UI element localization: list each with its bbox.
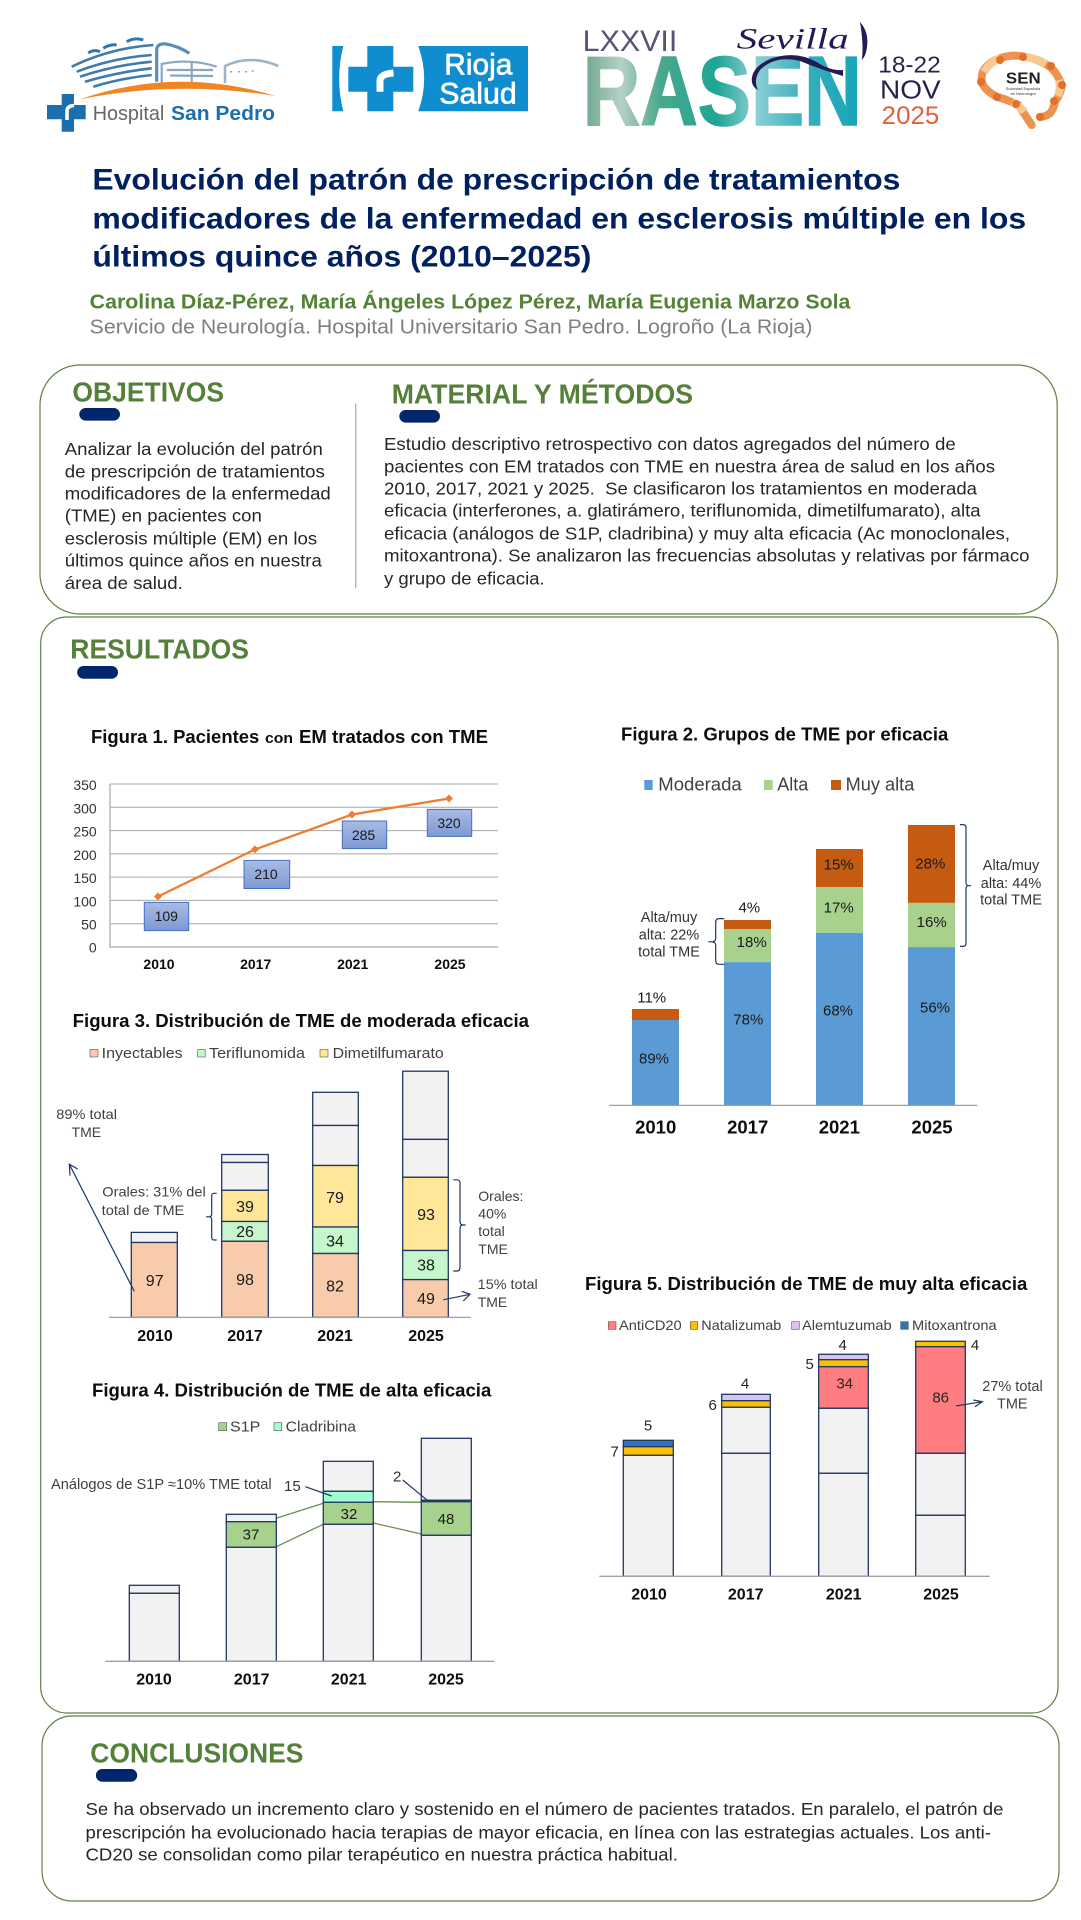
logo: SEN: Sociedad Española: [1006, 86, 1041, 91]
text: métodos: mitoxantrona). Se analizaron las frecuencias absolutas y relativas por fármaco: [384, 546, 1030, 566]
affiliation: Servicio de Neurología. Hospital Universitario San Pedro. Logroño (La Rioja): [90, 316, 812, 338]
legend: figura 5: Alemtuzumab: [802, 1317, 892, 1333]
logo: Rioja Salud: Salud: [439, 77, 517, 110]
annotation: orales 40%: TME: [478, 1241, 508, 1257]
logo: SEN: de Neurología: [1010, 91, 1036, 96]
chart: figura 4 stacked bars: 2025: [428, 1672, 464, 1689]
chart: figura 1 line chart: 200: [73, 847, 97, 863]
chart: figura 3 stacked bars: 34: [326, 1234, 344, 1251]
chart: figura 2 stacked bars: 56%: [920, 1000, 950, 1016]
heading: objetivos: OBJETIVOS: [72, 376, 224, 408]
pill: conclusiones: [96, 1769, 137, 1782]
annotation: alta/muy alta 22%: Alta/muy: [641, 910, 698, 926]
label: 15 cladribina: 15: [284, 1478, 301, 1495]
legend: figura 2: Muy alta: [846, 775, 915, 795]
chart: figura 1 line chart: 350: [73, 777, 97, 793]
chart: figura 1 line chart: 210: [254, 866, 278, 882]
connector lines: [276, 1502, 421, 1547]
chart: figura 1 line chart: 320: [437, 815, 461, 831]
annotation: 15% total TME: TME: [478, 1294, 507, 1310]
text: métodos: Estudio descriptivo retrospectivo con datos agregados del número de: [384, 434, 956, 454]
legend: figura 4: S1P: [230, 1419, 260, 1436]
figura 5 title: Figura 5. Distribución de TME de muy alta eficacia: [585, 1274, 1028, 1294]
pill: resultados: [77, 666, 118, 679]
chart: figura 2 stacked bars: 28%: [915, 856, 945, 873]
title: [92, 163, 1026, 274]
chart: figura 2 stacked bars: 11%: [637, 990, 666, 1006]
chart: figura 5 stacked bars: 86: [932, 1390, 949, 1407]
legend: figura 5: AntiCD20: [619, 1317, 682, 1333]
chart: figura 1 line chart: 2017: [240, 956, 271, 972]
chart: figura 5 stacked bars: 34: [836, 1376, 853, 1393]
annotation: orales 31%: [102, 1184, 217, 1240]
panel: objetivos y métodos: [40, 365, 1057, 614]
chart: figura 1 line chart: 250: [73, 824, 97, 840]
chart: figura 1 line chart: 150: [73, 870, 97, 886]
chart: figura 1 line chart: 0: [89, 940, 97, 956]
text: objetivos: de prescripción de tratamientos: [65, 462, 325, 482]
chart: figura 4 stacked bars: 2010: [136, 1672, 172, 1689]
text: objetivos: (TME) en pacientes con: [65, 506, 262, 526]
chart: figura 1 line chart: 2021: [337, 956, 368, 972]
chart: figura 1 line chart: 300: [73, 800, 97, 816]
annotation: 27% total TME: 27% total: [982, 1379, 1043, 1395]
chart: figura 2 stacked bars: [609, 775, 1042, 1138]
annotation: orales 31%: Orales: 31% del: [102, 1184, 206, 1200]
chart: figura 2 stacked bars: 78%: [733, 1011, 763, 1028]
logo: Rioja Salud: [332, 46, 528, 111]
chart: figura 4 stacked bars: 32: [341, 1506, 357, 1523]
text: conclusiones: CD20 se consolidan como pilar terapéutico en nuestra práctica habitual.: [86, 1844, 678, 1864]
chart: figura 5 stacked bars: 2010: [631, 1587, 667, 1604]
text: métodos: eficacia (análogos de S1P, cladribina) y muy alta eficacia (Ac monoclonales,: [384, 523, 1010, 543]
text: objetivos: últimos quince años en nuestra: [65, 551, 322, 571]
chart: figura 5 stacked bars: 4: [839, 1337, 847, 1354]
arrow: 89%: [69, 1164, 134, 1291]
chart: figura 3 stacked bars: [56, 1045, 538, 1345]
legend: figura 5: Mitoxantrona: [912, 1317, 997, 1333]
legend: figura 5: Natalizumab: [701, 1317, 782, 1333]
chart: figura 4 stacked bars: 2021: [331, 1672, 367, 1689]
text: métodos: [384, 434, 1030, 588]
chart: figura 1 line chart: 285: [352, 827, 375, 843]
label: 15 cladribina: [284, 1478, 332, 1496]
chart: figura 3 stacked bars: 97: [146, 1273, 164, 1290]
panel: conclusiones: [42, 1716, 1059, 1901]
legend: figura 2: Moderada: [658, 775, 743, 795]
text: conclusiones: [86, 1799, 1004, 1864]
title: modificadores de la enfermedad en esclerosis múltiple en los: [92, 202, 1026, 235]
chart: figura 1 line chart: 2010: [143, 956, 175, 972]
arrow: 15%: [443, 1291, 470, 1301]
chart: figura 2 stacked bars: 2010: [635, 1117, 676, 1138]
annotation: 27% total TME: [982, 1379, 1043, 1413]
chart: figura 5 stacked bars: 4: [741, 1376, 749, 1393]
chart: figura 5 stacked bars: 5: [644, 1418, 652, 1435]
chart: figura 3 stacked bars: 38: [417, 1258, 435, 1275]
annotation: 89% total TME: [56, 1106, 117, 1140]
text: conclusiones: Se ha observado un incremento claro y sostenido en el número de pacientes tratados. En paralelo, el patrón de: [86, 1799, 1004, 1819]
annotation: 27% total TME: TME: [997, 1397, 1028, 1413]
figura 1 title: con: [265, 730, 293, 747]
chart: figura 2 stacked bars: 2025: [911, 1117, 953, 1138]
annotation: orales 40%: total: [478, 1223, 505, 1239]
chart: figura 5 stacked bars: 2021: [826, 1587, 862, 1604]
pill: métodos: [399, 410, 440, 423]
figura 3 title: Figura 3. Distribución de TME de moderada eficacia: [73, 1011, 530, 1031]
chart: figura 5 stacked bars: 4: [971, 1337, 979, 1354]
chart: figura 3 stacked bars: 49: [417, 1291, 435, 1308]
logo: SEN: SEN: [1006, 70, 1041, 87]
legend: figura 2: [644, 775, 915, 795]
legend: figura 3: Dimetilfumarato: [333, 1045, 444, 1062]
label: 2 cladribina: [393, 1469, 429, 1502]
text: objetivos: [65, 439, 331, 593]
text: objetivos: área de salud.: [65, 573, 183, 593]
annotation: 89% total TME: TME: [72, 1124, 101, 1140]
logo: Rioja Salud: Rioja: [444, 48, 513, 81]
chart: figura 3 stacked bars: 2010: [137, 1328, 173, 1345]
legend: figura 5: [608, 1317, 997, 1333]
chart: figura 3 stacked bars: 93: [417, 1207, 435, 1224]
heading: resultados: RESULTADOS: [70, 634, 249, 664]
annotation: orales 40%: 40%: [478, 1206, 506, 1222]
chart: figura 3 stacked bars: 82: [326, 1279, 344, 1296]
pill: objetivos: [79, 408, 120, 421]
figura 2 title: Figura 2. Grupos de TME por eficacia: [621, 724, 949, 744]
annotation: 89% total TME: 89% total: [56, 1106, 117, 1122]
chart: figura 2 stacked bars: 2021: [819, 1117, 860, 1138]
label: 2 cladribina: 2: [393, 1469, 401, 1486]
chart: figura 1 line chart: [73, 777, 498, 972]
chart: figura 5 stacked bars: 2025: [923, 1587, 959, 1604]
annotation: 15% total TME: 15% total: [478, 1276, 538, 1292]
chart: figura 5 stacked bars: 2017: [728, 1587, 764, 1604]
title: últimos quince años (2010–2025): [92, 241, 591, 274]
chart: figura 2 stacked bars: 89%: [639, 1051, 669, 1068]
figura 4 title: Figura 4. Distribución de TME de alta eficacia: [92, 1381, 492, 1401]
chart: figura 1 line chart: 100: [73, 893, 97, 909]
heading: conclusiones: CONCLUSIONES: [90, 1738, 303, 1768]
chart: figura 3 stacked bars: 79: [326, 1190, 344, 1207]
logo: LXXVII RASEN Sevilla: 2025: [882, 102, 939, 130]
chart: figura 2 stacked bars: 15%: [824, 856, 854, 873]
chart: figura 2 stacked bars: 68%: [823, 1003, 853, 1020]
chart: figura 2 stacked bars: 4%: [738, 900, 760, 916]
chart: figura 3 stacked bars: 2017: [227, 1328, 263, 1345]
text: métodos: pacientes con EM tratados con TME en nuestra área de salud en los años: [384, 456, 995, 476]
chart: figura 3 stacked bars: 98: [236, 1272, 254, 1289]
annotation: orales 40%: Orales:: [478, 1188, 523, 1204]
legend: figura 3: Teriflunomida: [209, 1045, 306, 1062]
chart: figura 3 stacked bars: 2021: [317, 1328, 353, 1345]
annotation: alta/muy alta 22%: [638, 910, 724, 964]
logo: SEN: [977, 53, 1066, 125]
annotation: 15% total TME: [478, 1276, 538, 1310]
chart: figura 4 stacked bars: 48: [438, 1511, 454, 1528]
legend: figura 3: [90, 1045, 444, 1062]
chart: figura 5 stacked bars: 5: [806, 1356, 814, 1373]
chart: figura 3 stacked bars: 39: [236, 1199, 254, 1216]
text: métodos: eficacia (interferones, a. glatirámero, teriflunomida, dimetilfumarato), alta: [384, 501, 981, 521]
legend: figura 3: Inyectables: [102, 1045, 183, 1062]
chart: figura 3 stacked bars: 26: [236, 1224, 254, 1241]
annotation: alta/muy alta 22%: total TME: [638, 944, 700, 960]
annotation: alta/muy alta 44%: alta: 44%: [981, 876, 1041, 892]
panel: resultados: [41, 617, 1058, 1713]
logo: LXXVII RASEN Sevilla: 18-22: [878, 51, 941, 77]
logo: LXXVII RASEN Sevilla: LXXVII: [583, 25, 677, 58]
logo: Hospital San Pedro: [47, 39, 278, 132]
chart: figura 2 stacked bars: 17%: [824, 900, 854, 916]
text: métodos: y grupo de eficacia.: [384, 568, 545, 588]
legend: figura 4: Cladribina: [286, 1419, 357, 1436]
logo: LXXVII RASEN Sevilla: NOV: [880, 74, 941, 104]
authors: Carolina Díaz-Pérez, María Ángeles López Pérez, María Eugenia Marzo Sola: [90, 290, 851, 313]
legend: figura 2: Alta: [777, 775, 809, 795]
chart: figura 2 stacked bars: 2017: [727, 1117, 768, 1138]
logo: Hospital San Pedro: San Pedro: [171, 103, 275, 125]
text: objetivos: esclerosis múltiple (EM) en los: [65, 528, 317, 548]
text: objetivos: modificadores de la enfermedad: [65, 484, 331, 504]
legend: figura 4: [219, 1419, 357, 1436]
chart: figura 1 line chart: 109: [155, 908, 178, 924]
chart: figura 2 stacked bars: 16%: [917, 914, 947, 931]
title: Evolución del patrón de prescripción de tratamientos: [92, 163, 900, 196]
figura 1 title: EM tratados con TME: [299, 727, 488, 747]
annotation: alta/muy alta 22%: alta: 22%: [639, 927, 699, 943]
heading: material y métodos: MATERIAL Y MÉTODOS: [392, 378, 693, 409]
text: objetivos: Analizar la evolución del patrón: [65, 439, 323, 459]
logo: Hospital San Pedro: Hospital: [93, 103, 164, 125]
annotation: alta/muy alta 44%: [960, 825, 1042, 946]
annotation: alta/muy alta 44%: Alta/muy: [983, 858, 1040, 874]
chart: figura 4 stacked bars: 2017: [234, 1672, 270, 1689]
text: conclusiones: prescripción ha evolucionado hacia terapias de mayor eficacia, en línea con las estrategias actuales. Los anti-: [86, 1822, 991, 1842]
chart: figura 4 stacked bars: 37: [243, 1526, 259, 1543]
annotation: análogos S1P: Análogos de S1P ≈10% TME total: [51, 1477, 272, 1493]
figura 1 title: Figura 1. Pacientes: [91, 727, 259, 747]
annotation: alta/muy alta 44%: total TME: [980, 893, 1042, 909]
logo: LXXVII RASEN Sevilla: RASEN: [583, 36, 862, 146]
figura 1 title: [91, 727, 488, 747]
arrow: 27%: [956, 1400, 982, 1407]
chart: figura 3 stacked bars: 2025: [408, 1328, 444, 1345]
annotation: orales 40%: [453, 1180, 523, 1271]
logo: LXXVII RASEN Sevilla: Sevilla: [737, 22, 849, 55]
chart: figura 4 stacked bars: [51, 1419, 494, 1689]
annotation: orales 31%: total de TME: [102, 1202, 184, 1218]
chart: figura 5 stacked bars: 6: [709, 1397, 717, 1414]
chart: figura 5 stacked bars: [599, 1317, 1043, 1604]
text: métodos: 2010, 2017, 2021 y 2025. Se clasificaron los tratamientos en moderada: [384, 478, 977, 498]
chart: figura 5 stacked bars: 7: [611, 1444, 619, 1461]
chart: figura 1 line chart: 2025: [434, 956, 466, 972]
chart: figura 2 stacked bars: 18%: [737, 934, 767, 951]
chart: figura 1 line chart: 50: [81, 917, 97, 933]
